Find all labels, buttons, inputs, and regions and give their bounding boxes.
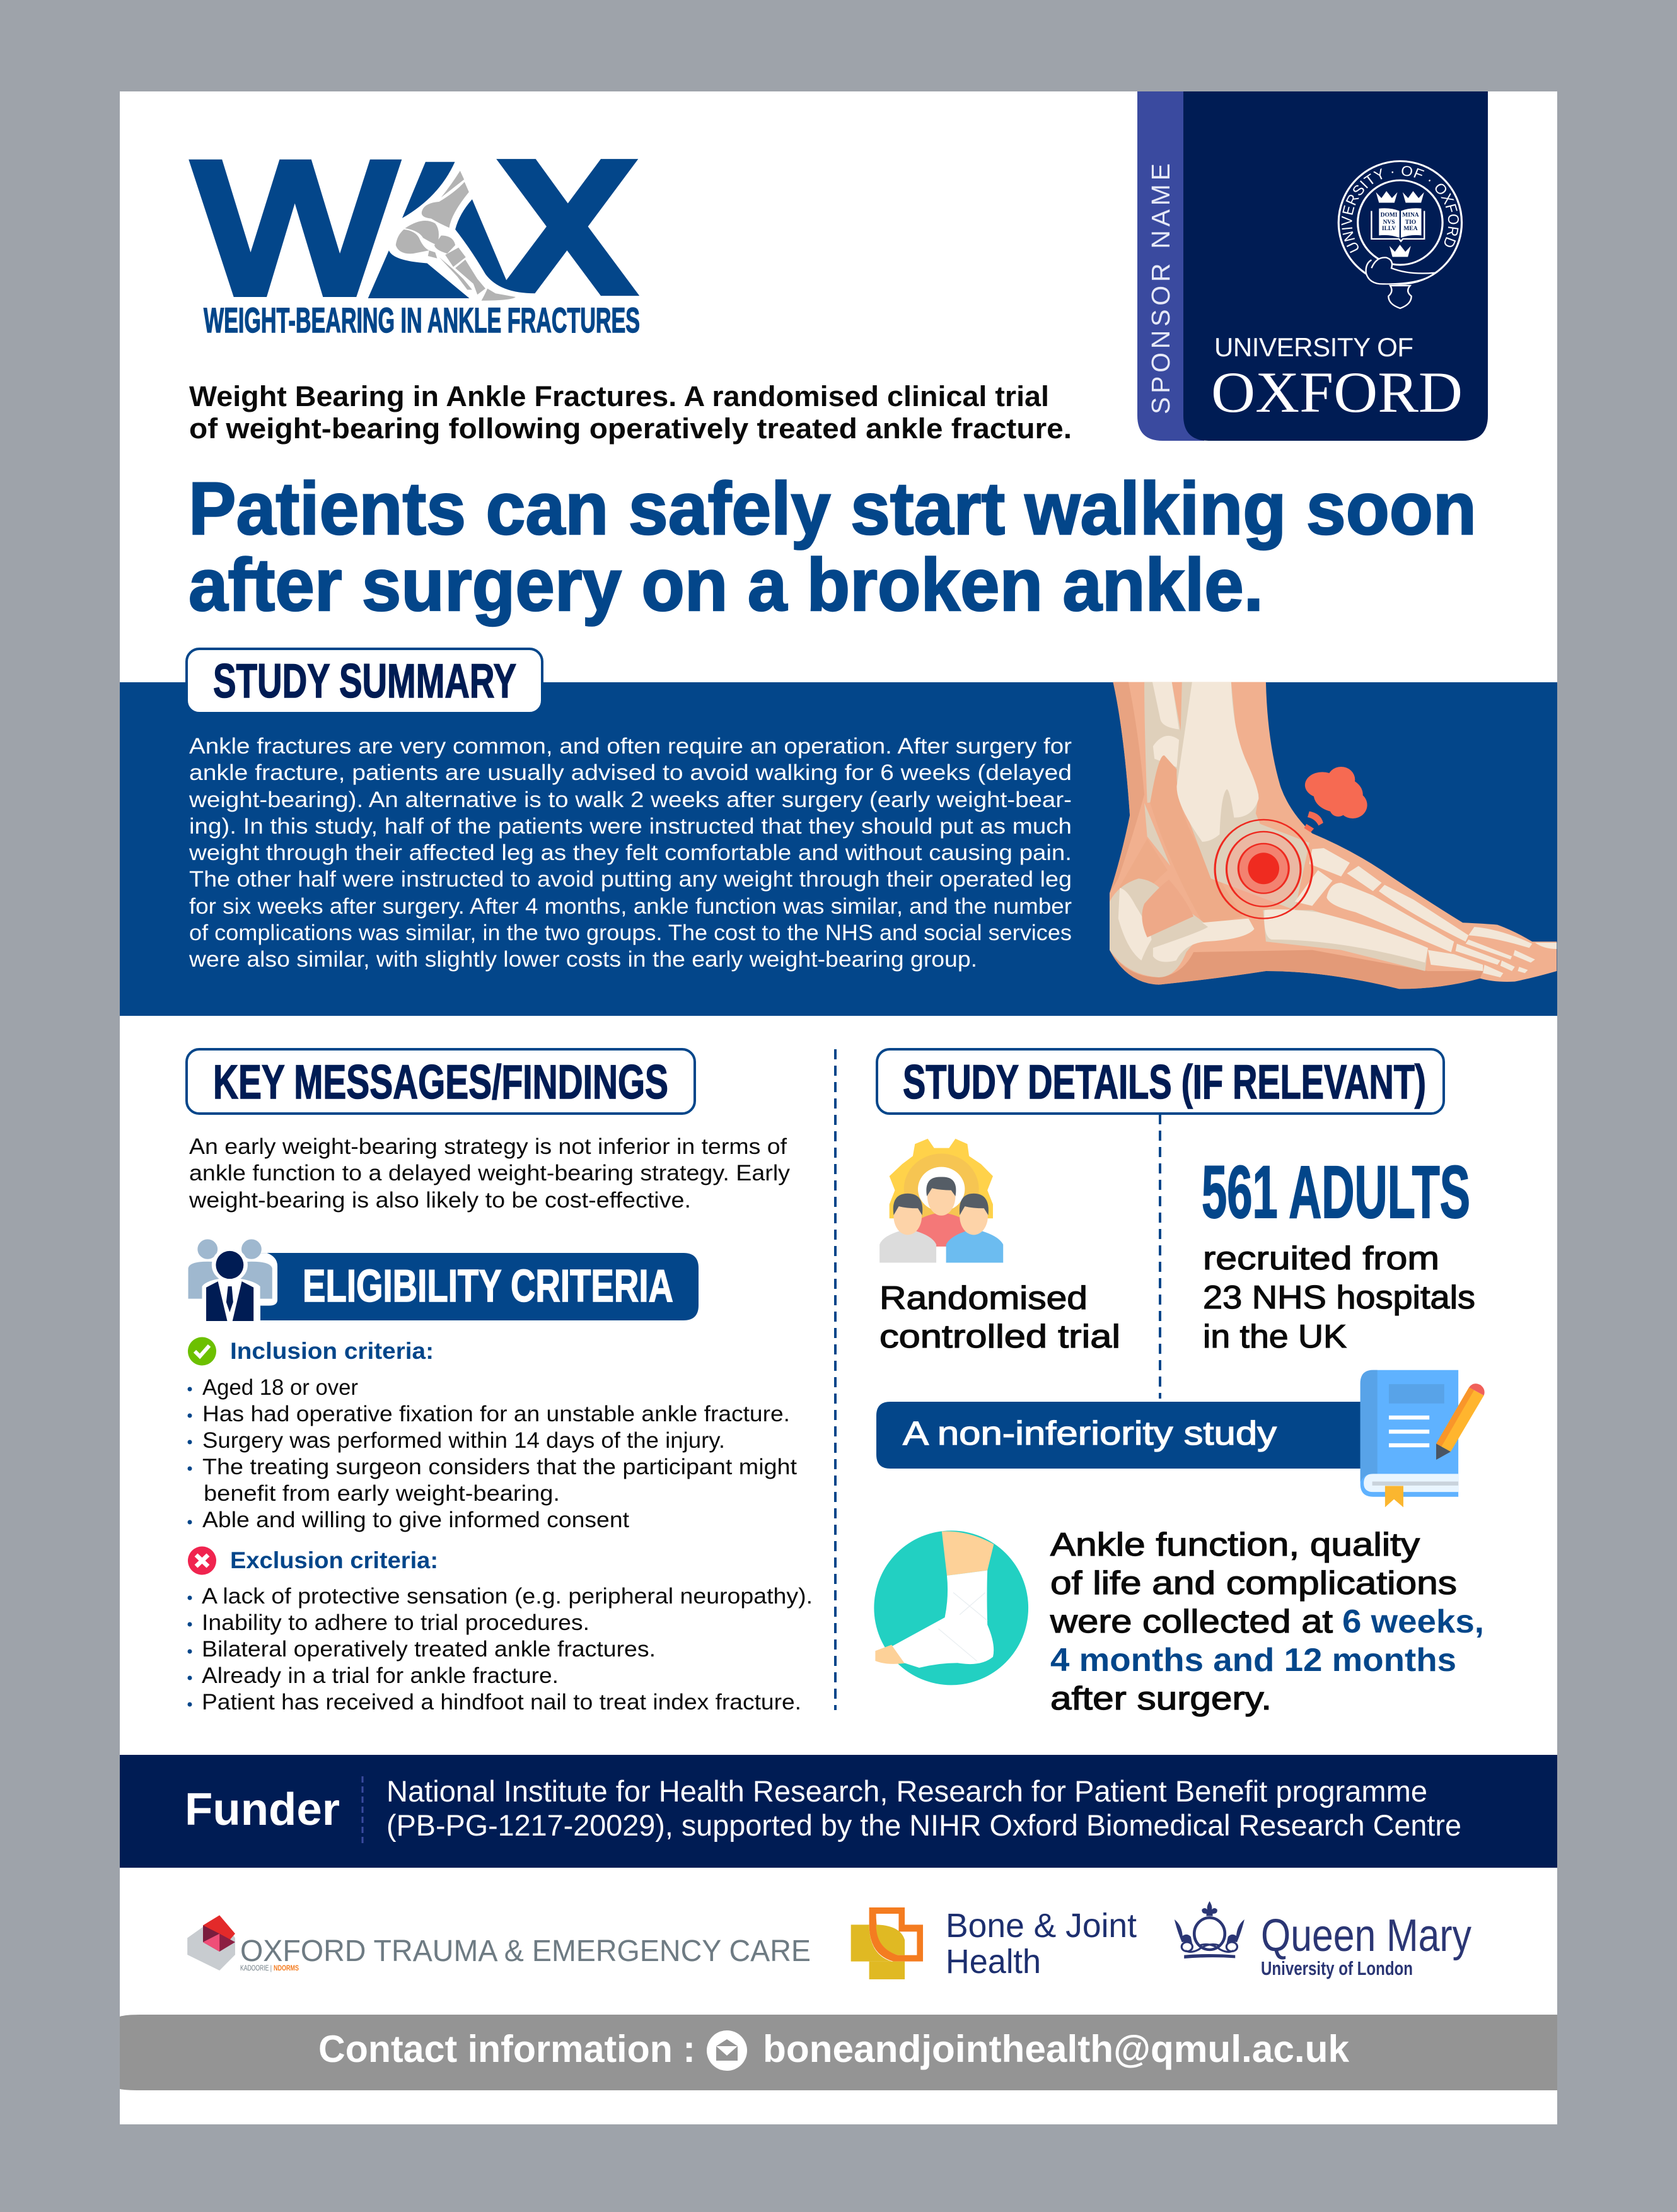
university of: UNIVERSITY OF [1214,332,1413,362]
icon: book and pencil [1361,1370,1485,1507]
icon: bandaged ankle [874,1530,1028,1685]
follow-up text: 4 months and 12 months [1050,1642,1456,1679]
panel: study details [874,1049,1485,1717]
trauma wordmark: OXFORD TRAUMA & EMERGENCY CARE [240,1935,811,1968]
sponsor tab [1137,91,1204,441]
oxford crest: NVS [1383,219,1395,225]
exclusion list: Bilateral operatively treated ankle fractures. [202,1637,656,1662]
bone joint text: Health [946,1943,1041,1981]
exclusion list: A lack of protective sensation (e.g. peripheral neuropathy). [202,1584,813,1609]
inclusion list: Has had operative fixation for an unstable ankle fracture. [202,1402,790,1426]
exclusion list: Already in a trial for ankle fracture. [202,1663,559,1688]
icon: red cross [188,1546,216,1575]
summary text: Ankle fractures are very common, and often require an operation. After surgery for [189,734,1072,759]
main headline: Patients can safely start walking soon [189,467,1477,550]
icon: trauma gem [187,1915,235,1970]
inclusion criteria [188,1337,797,1532]
oxford wordmark: OXFORD [1211,360,1463,424]
recruitment text: in the UK [1203,1318,1347,1355]
bone joint text [946,1907,1137,1981]
exclusion criteria [188,1546,813,1714]
oxford crest: UNIVERSITY · OF · OXFORD [1342,166,1459,253]
randomised controlled trial: Randomised [879,1280,1088,1317]
key messages heading: KEY MESSAGES/FINDINGS [213,1056,668,1109]
recruitment text: recruited from [1203,1240,1439,1277]
summary text: of complications was similar, in the two groups. The cost to the NHS and social services [189,921,1072,945]
WAX logo [189,159,640,340]
study details heading: STUDY DETAILS (IF RELEVANT) [903,1056,1426,1109]
key messages heading [187,1049,695,1114]
logo subtitle: WEIGHT-BEARING IN ANKLE FRACTURES [204,300,640,340]
oxford crest: DOMI [1381,212,1398,218]
inclusion list [188,1375,797,1532]
funder text: (PB-PG-1217-20029), supported by the NIHR Oxford Biomedical Research Centre [386,1808,1461,1842]
bone joint text: Bone & Joint [946,1907,1137,1945]
funder text [386,1774,1461,1842]
summary text: were also similar, with slightly lower costs in the early weight-bearing group. [189,947,977,972]
exclusion list: Patient has received a hindfoot nail to treat index fracture. [202,1690,801,1714]
inclusion list: benefit from early weight-bearing. [204,1481,560,1506]
key messages text: An early weight-bearing strategy is not inferior in terms of [189,1134,787,1159]
key messages text [189,1134,791,1213]
oxford crest: TIO [1405,219,1416,225]
oxford crest [1338,160,1463,309]
summary tab [187,649,542,713]
logo: oxford trauma [187,1915,811,1972]
study subtitle [189,380,1072,445]
non-inferiority banner [876,1402,1368,1469]
summary text [189,734,1072,972]
study subtitle: of weight-bearing following operatively treated ankle fracture. [189,412,1072,445]
key messages text: ankle function to a delayed weight-bearing strategy. Early [189,1161,791,1185]
icon: people [189,1239,277,1322]
summary tab: STUDY SUMMARY [213,655,516,708]
inclusion list: The treating surgeon considers that the participant might [202,1455,797,1479]
queen mary wordmark: Queen Mary [1261,1911,1471,1961]
logo: queen mary [1175,1901,1471,1979]
sponsor panel [1137,91,1488,441]
sponsor name: SPONSOR NAME [1146,163,1175,414]
icon: envelope [707,2030,747,2071]
trauma sub-line: KADOORIE | [240,1964,272,1972]
pain cloud [1304,767,1367,832]
contact email: boneandjointhealth@qmul.ac.uk [763,2028,1350,2070]
white sheet [120,91,1557,2124]
exclusion list [188,1584,813,1714]
foot illustration [1110,682,1557,989]
summary text: The other half were instructed to avoid putting any weight through their operated leg [189,867,1072,892]
inclusion list: Able and willing to give informed consent [202,1508,629,1532]
icon: queen mary crest [1175,1901,1245,1959]
icon: bone joint cross [851,1907,923,1979]
logo: oxford trauma: NDORMS [274,1964,299,1972]
university of london: University of London [1261,1957,1413,1979]
funder label: Funder [185,1784,340,1835]
logo: bone and joint health [851,1907,1137,1981]
oxford crest: MINA [1402,212,1419,218]
study details heading [877,1049,1444,1114]
icon: team and gear [879,1139,1003,1262]
follow-up text [1050,1527,1484,1717]
inclusion list: Aged 18 or over [202,1375,358,1400]
exclusion list: Inability to adhere to trial procedures. [202,1610,589,1635]
main headline: after surgery on a broken ankle. [189,544,1263,627]
logo ankle bones [396,171,516,301]
oxford crest: MEA [1403,225,1418,231]
oxford crest: ILLV [1382,225,1396,231]
eligibility heading: ELIGIBILITY CRITERIA [303,1261,673,1312]
561 adults stat: 561 ADULTS [1202,1151,1470,1234]
summary text: ankle fracture, patients are usually advised to avoid walking for 6 weeks (delayed [189,760,1072,785]
main headline [189,467,1477,627]
oxford navy block [1183,91,1488,441]
panel: key messages [187,1049,791,1213]
recruitment text: 23 NHS hospitals [1203,1279,1475,1316]
funder text: National Institute for Health Research, Research for Patient Benefit programme [386,1774,1427,1808]
follow-up text: of life and complications [1050,1565,1457,1602]
panel: study summary [120,649,1557,1016]
logo letters [189,159,639,298]
contact bar [120,2015,1557,2090]
randomised controlled trial: controlled trial [879,1318,1120,1355]
follow-up text: 6 weeks, [1342,1604,1484,1640]
follow-up text: Ankle function, quality [1050,1527,1420,1563]
non-inferiority banner: A non-inferiority study [903,1415,1277,1452]
summary text: for six weeks after surgery. After 4 months, ankle function was similar, and the number [189,894,1072,919]
study subtitle: Weight Bearing in Ankle Fractures. A randomised clinical trial [189,380,1049,412]
eligibility criteria banner [189,1239,699,1322]
follow-up text: after surgery. [1050,1680,1272,1717]
summary text: weight-bearing). An alternative is to walk 2 weeks after surgery (early weight-bear- [189,788,1072,812]
follow-up text: were collected at [1050,1604,1333,1640]
inclusion list: Surgery was performed within 14 days of the injury. [202,1428,725,1453]
randomised controlled trial [879,1280,1120,1355]
contact label: Contact information : [318,2028,695,2070]
summary text: ing). In this study, half of the patients were instructed that they should put as much [189,814,1072,839]
key messages text: weight-bearing is also likely to be cost-effective. [189,1188,691,1213]
panel: funder [120,1755,1557,1868]
summary band [120,682,1557,1016]
recruitment text [1203,1240,1475,1355]
pain target rings [1215,820,1312,919]
inclusion heading: Inclusion criteria: [230,1338,434,1364]
icon: green tick [188,1337,216,1366]
summary text: weight through their affected leg as they felt comfortable and without causing pain. [189,841,1072,865]
exclusion heading: Exclusion criteria: [230,1547,438,1573]
